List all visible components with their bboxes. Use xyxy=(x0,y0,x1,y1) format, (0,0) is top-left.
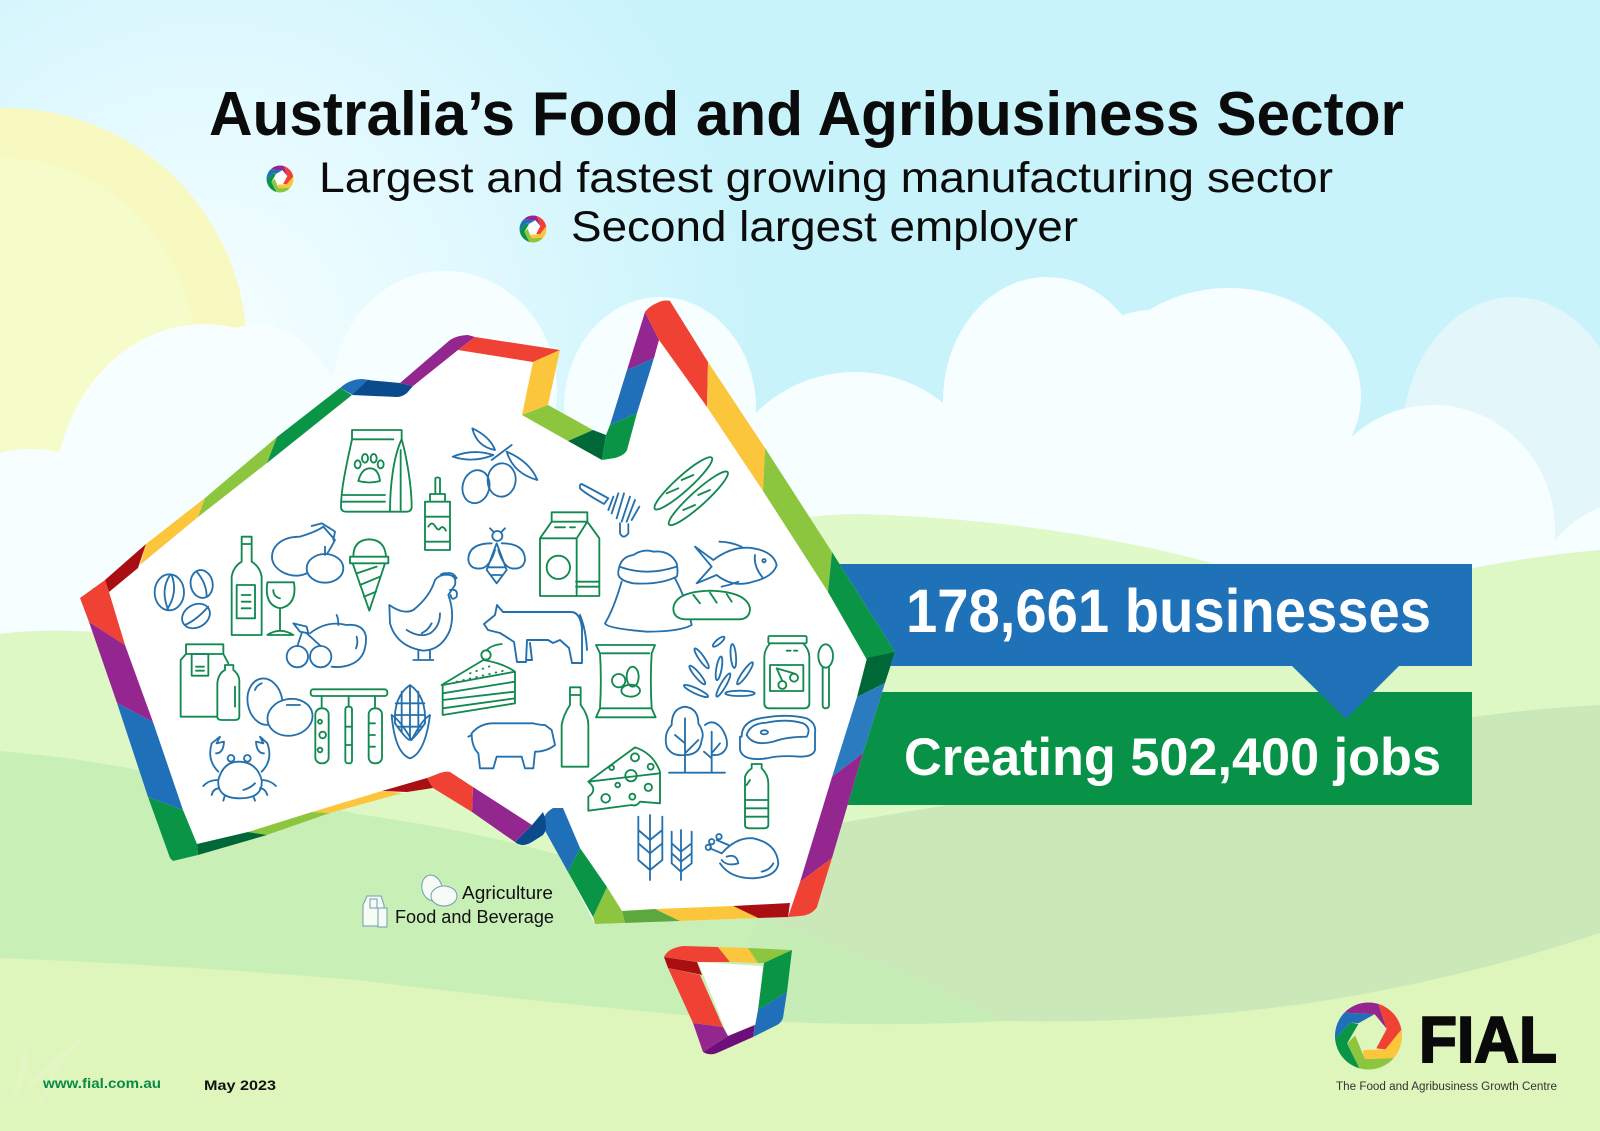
icon: cheese xyxy=(588,747,660,811)
subtitle line 1: Largest and fastest growing manufacturing sector xyxy=(319,154,1333,202)
icon: ice cream xyxy=(350,539,388,611)
bullet icon 2 xyxy=(517,213,549,246)
icon: pig xyxy=(468,723,555,768)
icon: sauce bottle xyxy=(425,477,450,550)
icon: milk carton xyxy=(540,512,599,596)
icon: olives xyxy=(453,428,537,506)
icon: wine glass xyxy=(267,582,295,635)
icon: spoon xyxy=(818,644,833,708)
logo mark xyxy=(1327,996,1409,1079)
icon: wine bottle xyxy=(232,537,262,635)
icon: steak xyxy=(740,716,815,759)
icon: cow xyxy=(484,605,587,663)
icon: bread loaf xyxy=(673,591,750,619)
icon: wheat xyxy=(638,815,692,880)
legend xyxy=(363,873,554,927)
stat box: businesses xyxy=(820,564,1472,719)
stat box: businesses: 178,661 businesses xyxy=(906,577,1431,645)
logo tagline: The Food and Agribusiness Growth Centre xyxy=(1336,1081,1557,1093)
legend label: agriculture: Agriculture xyxy=(462,883,553,903)
stat box: jobs: Creating 502,400 jobs xyxy=(904,728,1441,787)
icon: baguettes xyxy=(650,452,732,530)
icon: packet and bottle xyxy=(181,644,239,720)
icon: apple and cherries xyxy=(287,615,366,667)
icon: coffee beans xyxy=(155,568,215,633)
background: hills xyxy=(0,514,1600,1131)
icon: rice grains xyxy=(683,635,755,699)
icon: corn xyxy=(392,685,430,758)
icon: biscuit packet xyxy=(596,645,656,717)
icon: pet food bag xyxy=(341,430,412,512)
icon: roast chicken xyxy=(706,834,778,878)
subtitle line 2: Second largest employer xyxy=(571,203,1078,251)
icon: preserve jar xyxy=(764,636,809,708)
icon: trees xyxy=(666,707,727,773)
logo wordmark: FIAL xyxy=(1419,1003,1557,1076)
icon: hen xyxy=(389,573,457,660)
food icons, north-west group xyxy=(155,428,537,667)
icon: hanging sausages xyxy=(311,689,387,763)
background: sun xyxy=(0,108,247,592)
icon: cake slice xyxy=(442,644,515,715)
icon: beer bottle xyxy=(562,687,588,767)
map: mainland Australia xyxy=(80,300,895,924)
title: Australia’s Food and Agribusiness Sector xyxy=(209,80,1404,149)
stat box: jobs xyxy=(820,692,1472,805)
icon: oil bottle xyxy=(745,764,768,828)
icon: fish xyxy=(695,542,777,587)
icon: eggplant and tomato xyxy=(272,523,343,583)
icon: flour sack xyxy=(605,551,692,632)
icon: bee xyxy=(468,528,525,583)
icon: eggs xyxy=(244,676,316,739)
footer: website: www.fial.com.au xyxy=(42,1075,161,1091)
faint wheat decoration xyxy=(15,1040,80,1105)
icon: crab xyxy=(203,737,276,801)
food icons, south-east group xyxy=(562,635,833,880)
map: Tasmania xyxy=(664,946,792,1054)
icon: honey dipper xyxy=(580,484,639,537)
background: clouds xyxy=(0,271,1600,720)
legend icon: eggs xyxy=(419,873,457,906)
food icons, south-west group xyxy=(181,644,555,801)
legend icon: food and beverage xyxy=(363,896,387,927)
food icons, north-east group xyxy=(540,452,777,632)
FIAL logo xyxy=(1327,996,1557,1093)
legend label: food and beverage: Food and Beverage xyxy=(395,907,554,927)
footer: date: May 2023 xyxy=(204,1077,276,1093)
bullet icon 1 xyxy=(264,163,296,196)
